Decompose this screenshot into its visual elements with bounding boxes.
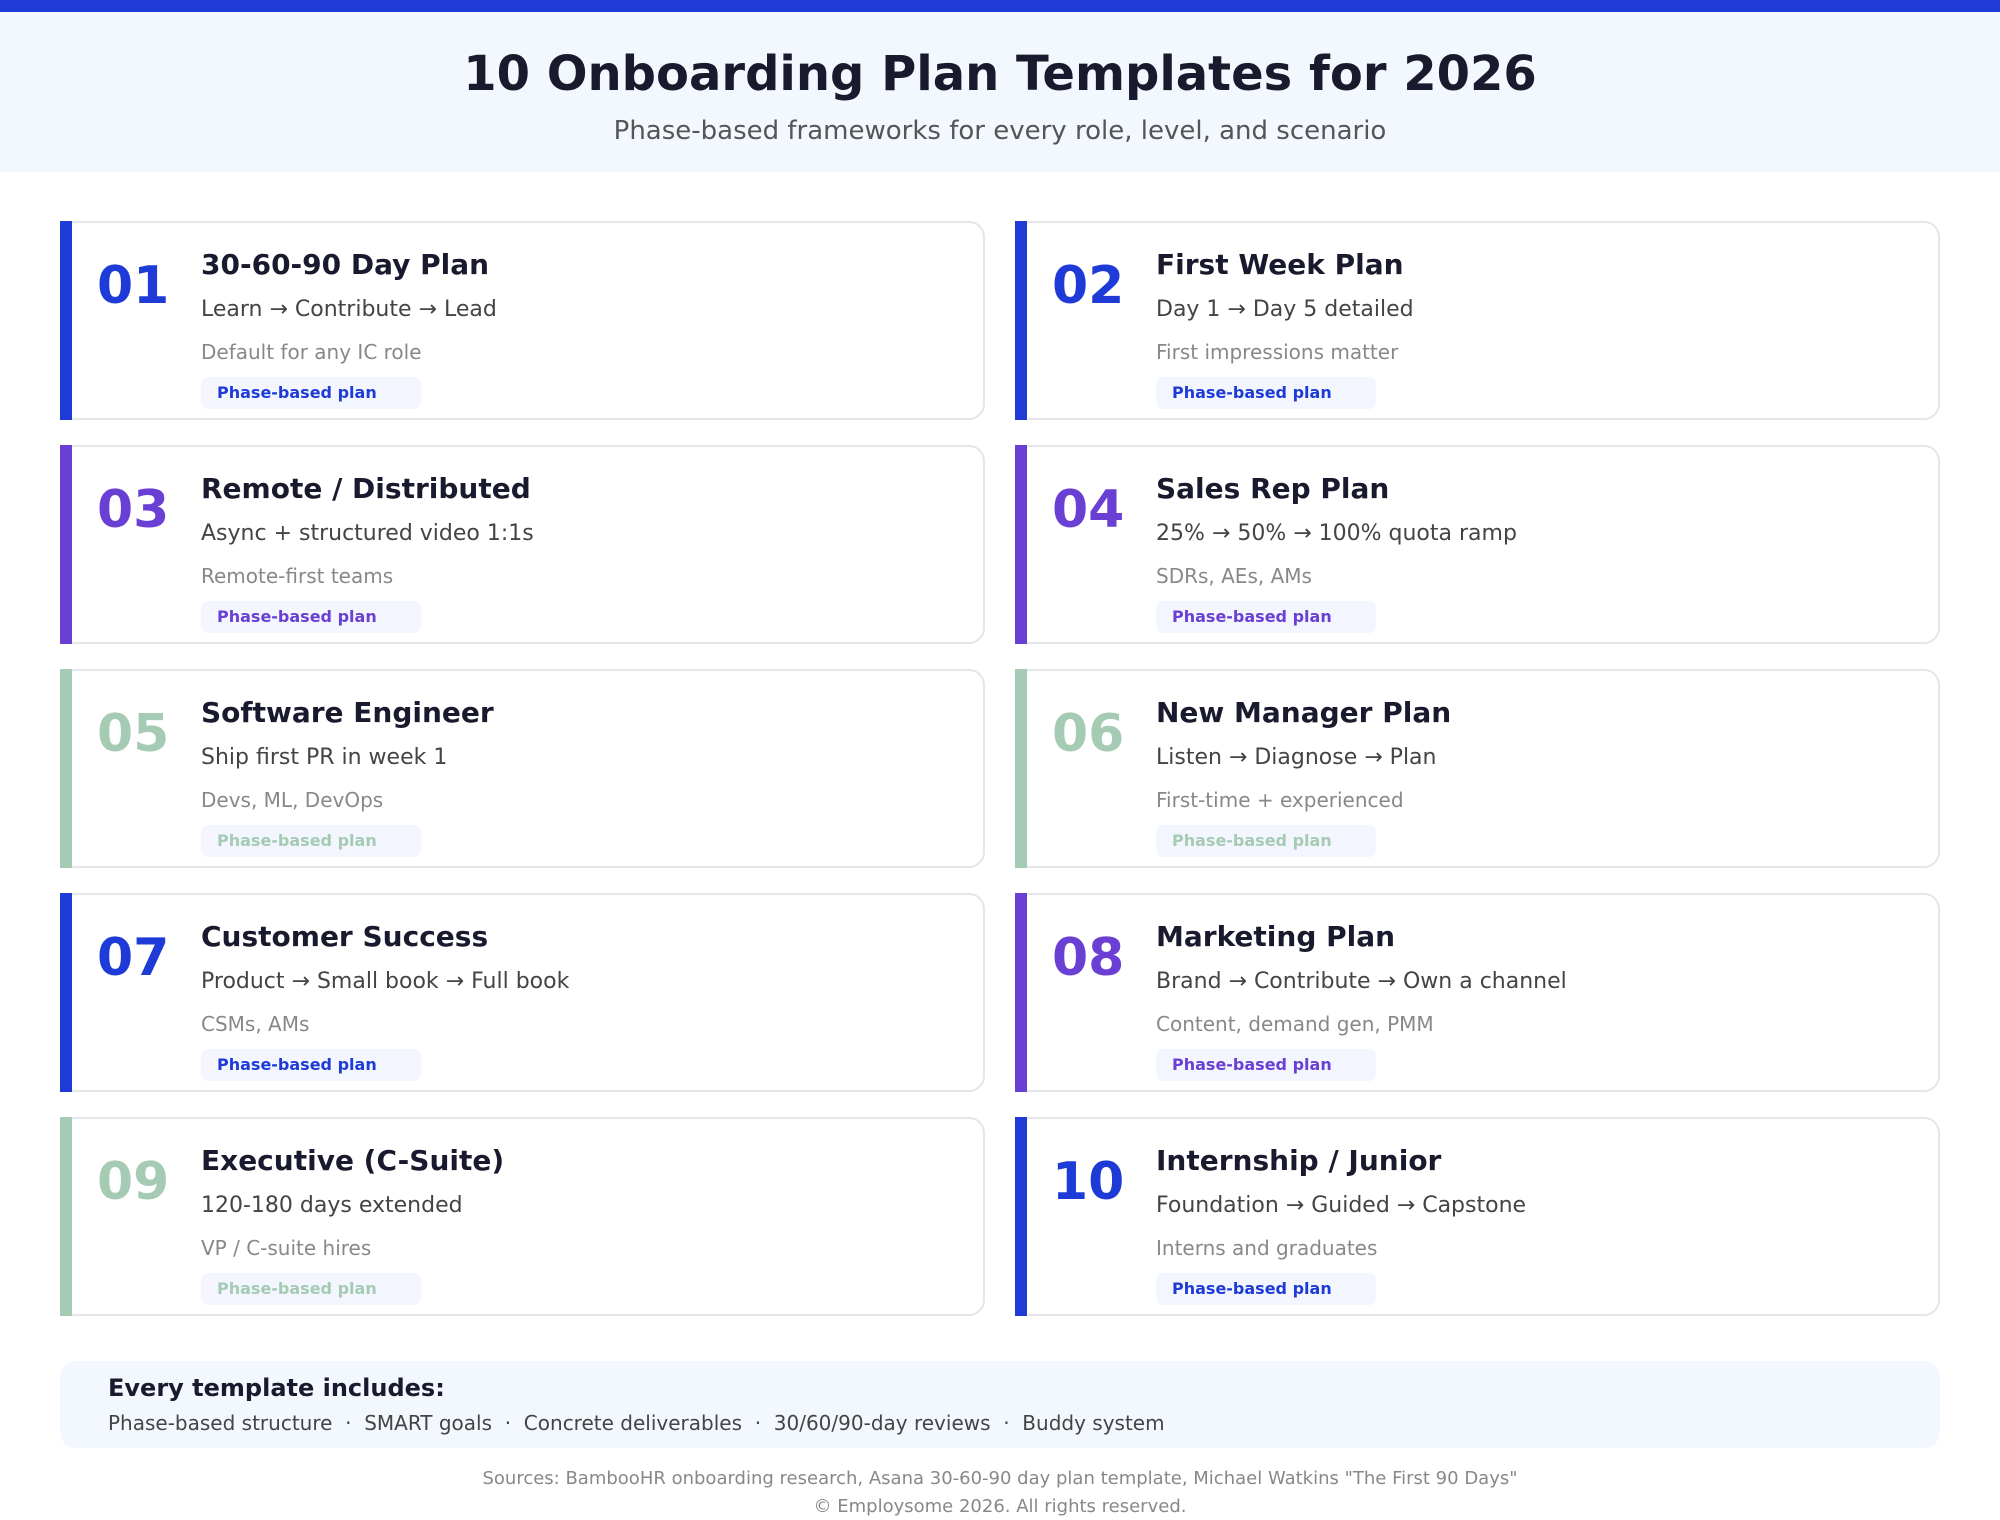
card 03	[60, 445, 985, 644]
copyright: © Employsome 2026. All rights reserved.	[814, 1496, 1186, 1517]
card 01: 01	[97, 256, 169, 316]
card 02: First Week Plan	[1156, 248, 1404, 281]
card 06: Listen → Diagnose → Plan	[1156, 745, 1436, 770]
card 06: New Manager Plan	[1156, 696, 1451, 729]
card 03: 03	[97, 480, 169, 540]
subtitle: Phase-based frameworks for every role, level, and scenario	[614, 116, 1386, 146]
card 10: Internship / Junior	[1156, 1144, 1441, 1177]
card 01: Default for any IC role	[201, 340, 422, 364]
card 07: CSMs, AMs	[201, 1012, 309, 1036]
card 08: 08	[1052, 928, 1124, 988]
card 02	[1015, 221, 1940, 420]
card 09: 09	[97, 1152, 169, 1212]
card 03: Async + structured video 1:1s	[201, 521, 534, 546]
footer panel: every template includes: Every template includes:	[108, 1374, 445, 1402]
card 08: Phase-based plan	[1172, 1055, 1332, 1074]
card 09: Executive (C-Suite)	[201, 1144, 504, 1177]
card 03: Remote-first teams	[201, 564, 393, 588]
card 06	[1015, 669, 1940, 868]
card 09: 120-180 days extended	[201, 1193, 463, 1218]
card 01: 30-60-90 Day Plan	[201, 248, 489, 281]
card 06: 06	[1052, 704, 1124, 764]
card 05	[60, 669, 985, 868]
card 04: Sales Rep Plan	[1156, 472, 1389, 505]
card 07	[60, 893, 985, 1092]
card 07: Customer Success	[201, 920, 488, 953]
card 04: 04	[1052, 480, 1124, 540]
card 08: Marketing Plan	[1156, 920, 1395, 953]
card 09: VP / C-suite hires	[201, 1236, 371, 1260]
card 08: Content, demand gen, PMM	[1156, 1012, 1434, 1036]
card 02: 02	[1052, 256, 1124, 316]
card 08: Brand → Contribute → Own a channel	[1156, 969, 1567, 994]
card 06: Phase-based plan	[1172, 831, 1332, 850]
card 04: Phase-based plan	[1172, 607, 1332, 626]
card 02: Day 1 → Day 5 detailed	[1156, 297, 1414, 322]
card 10: 10	[1052, 1152, 1124, 1212]
card 10: Foundation → Guided → Capstone	[1156, 1193, 1526, 1218]
card 09	[60, 1117, 985, 1316]
card 09: Phase-based plan	[217, 1279, 377, 1298]
card 03: Phase-based plan	[217, 607, 377, 626]
card 05: Devs, ML, DevOps	[201, 788, 383, 812]
card 08	[1015, 893, 1940, 1092]
title: 10 Onboarding Plan Templates for 2026	[463, 46, 1537, 102]
card 05: Ship first PR in week 1	[201, 745, 447, 770]
card 01: Learn → Contribute → Lead	[201, 297, 497, 322]
footer panel: every template includes: Phase-based structure · SMART goals · Concrete deliverables · 30/60/90-day reviews · Buddy system	[108, 1411, 1165, 1435]
card 10: Phase-based plan	[1172, 1279, 1332, 1298]
card 02: First impressions matter	[1156, 340, 1398, 364]
card 07: 07	[97, 928, 169, 988]
card 07: Product → Small book → Full book	[201, 969, 569, 994]
card 07: Phase-based plan	[217, 1055, 377, 1074]
card 03: Remote / Distributed	[201, 472, 531, 505]
card 05: Phase-based plan	[217, 831, 377, 850]
card 01	[60, 221, 985, 420]
card 04: 25% → 50% → 100% quota ramp	[1156, 521, 1517, 546]
sources: Sources: BambooHR onboarding research, Asana 30-60-90 day plan template, Michael Watkins "The First 90 Days"	[482, 1468, 1518, 1489]
card 06: First-time + experienced	[1156, 788, 1404, 812]
card 10	[1015, 1117, 1940, 1316]
card 05: Software Engineer	[201, 696, 494, 729]
card 04: SDRs, AEs, AMs	[1156, 564, 1312, 588]
card 02: Phase-based plan	[1172, 383, 1332, 402]
card 01: Phase-based plan	[217, 383, 377, 402]
card 04	[1015, 445, 1940, 644]
card 10: Interns and graduates	[1156, 1236, 1377, 1260]
card 05: 05	[97, 704, 169, 764]
footer panel: every template includes	[60, 1361, 1940, 1448]
